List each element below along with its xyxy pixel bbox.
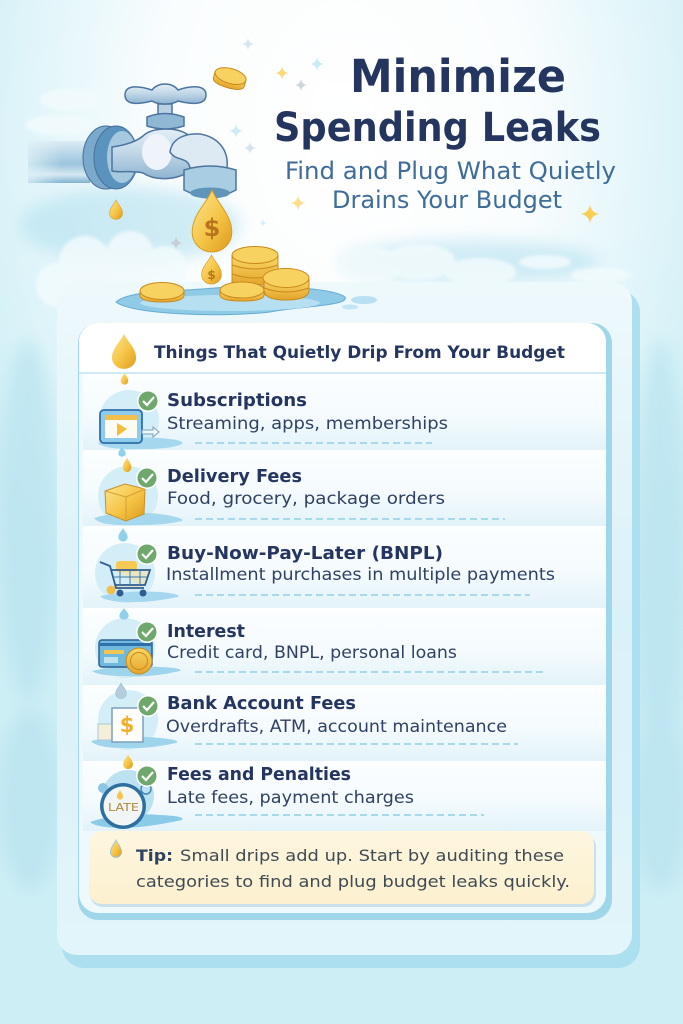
row text: Late fees, payment charges [167, 788, 414, 807]
row text: Installment purchases in multiple payments [166, 565, 555, 584]
row text: Food, grocery, package orders [167, 489, 445, 508]
drips between rows [116, 447, 133, 769]
tip text: Small drips add up. Start by auditing these [180, 846, 564, 865]
icon: bank statement: $ [120, 713, 134, 737]
icon: shopping cart [95, 543, 179, 603]
icon: header drop [112, 334, 136, 385]
title: Minimize [350, 50, 566, 103]
row: Fees and Penalties [90, 765, 484, 829]
title [274, 50, 601, 151]
tip text: Tip: [136, 846, 173, 865]
check badge [137, 695, 159, 717]
subtitle [285, 157, 616, 214]
row: Subscriptions [98, 390, 448, 450]
row text [166, 694, 507, 736]
handle [125, 84, 206, 129]
check badge [136, 543, 158, 565]
icon: late clock [90, 770, 183, 829]
flying coin [212, 64, 248, 92]
row text: Credit card, BNPL, personal loans [167, 643, 457, 662]
row: Interest [92, 618, 545, 678]
faucet body [112, 129, 227, 179]
check badge [136, 467, 158, 489]
row text: Overdrafts, ATM, account maintenance [166, 717, 507, 736]
row text [167, 467, 445, 508]
row: Delivery Fees [94, 466, 505, 526]
row text [167, 391, 448, 433]
check badge [136, 621, 158, 643]
big drop [192, 190, 232, 252]
row: Bank Account Fees [91, 690, 518, 750]
row text: Delivery Fees [167, 467, 302, 487]
row text: Fees and Penalties [167, 765, 351, 785]
icon: late clock: LATE [108, 802, 139, 814]
row text: Subscriptions [167, 391, 307, 411]
small dollar drop [202, 255, 221, 284]
tip callout [89, 831, 596, 907]
check badge [136, 765, 158, 787]
row text [167, 622, 457, 662]
row text: Bank Account Fees [167, 694, 356, 714]
pipe [26, 139, 90, 185]
puddle [116, 287, 377, 315]
row text: Interest [167, 622, 245, 642]
sparkles [170, 38, 600, 250]
icon: video screen [98, 390, 183, 450]
background clouds [0, 89, 683, 890]
title: Spending Leaks [274, 105, 601, 151]
row text: Buy-Now-Pay-Later (BNPL) [167, 544, 443, 564]
big drop: $ [204, 214, 220, 242]
flange [83, 126, 138, 189]
row: Buy-Now-Pay-Later [95, 543, 555, 603]
tip text [136, 846, 570, 891]
row text [166, 544, 555, 584]
panel: inner list card [78, 323, 612, 920]
icon: tip drop [110, 840, 122, 857]
coin stack [220, 246, 309, 301]
icon: bank statement [91, 690, 177, 750]
header band [79, 323, 606, 385]
coin left [140, 282, 184, 302]
faucet illustration [26, 64, 377, 315]
subtitle: Find and Plug What Quietly [285, 157, 616, 185]
subtitle: Drains Your Budget [332, 186, 562, 214]
panel: outer frosted card [57, 282, 640, 968]
icon: credit card and coin [92, 618, 181, 678]
panel heading: Things That Quietly Drip From Your Budget [154, 343, 565, 363]
tip text: categories to find and plug budget leaks quickly. [136, 872, 570, 891]
nozzle [184, 166, 236, 198]
icon: parcel box [94, 466, 183, 526]
check badge [137, 390, 159, 412]
row text [167, 765, 414, 807]
row text: Streaming, apps, memberships [167, 414, 448, 433]
small dollar drop: $ [207, 268, 216, 282]
small drop left [109, 200, 123, 219]
